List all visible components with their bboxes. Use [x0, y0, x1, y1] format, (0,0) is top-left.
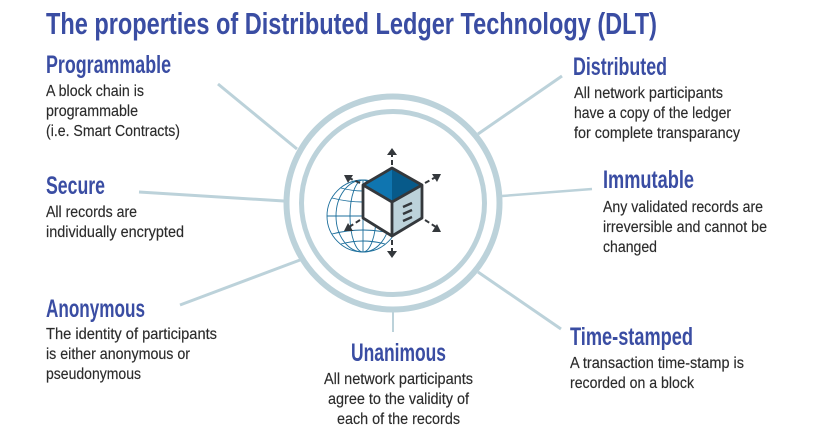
Unanimous: All network participants: [324, 371, 473, 388]
Immutable: irreversible and cannot be: [603, 219, 767, 236]
Distributed: [573, 53, 740, 142]
Anonymous: pseudonymous: [46, 366, 141, 383]
Distributed: All network participants: [574, 85, 723, 102]
Unanimous: agree to the validity of: [328, 391, 469, 408]
Distributed: for complete transparancy: [574, 125, 740, 142]
Distributed: have a copy of the ledger: [574, 105, 732, 122]
Secure: Secure: [46, 172, 105, 200]
Anonymous: [46, 295, 217, 383]
Programmable: programmable: [46, 103, 138, 120]
connector lines: [139, 76, 592, 332]
Immutable: changed: [603, 239, 657, 256]
Anonymous: Anonymous: [46, 295, 145, 323]
Time-stamped: A transaction time-stamp is: [570, 355, 744, 372]
Secure: All records are: [46, 204, 137, 221]
Anonymous: is either anonymous or: [46, 346, 191, 363]
Programmable: (i.e. Smart Contracts): [46, 123, 180, 140]
Programmable: [46, 51, 180, 140]
Unanimous: Unanimous: [351, 339, 446, 367]
Immutable: Any validated records are: [603, 199, 763, 216]
Unanimous: [324, 339, 473, 428]
Time-stamped: recorded on a block: [570, 375, 695, 392]
Secure: individually encrypted: [46, 224, 184, 241]
rings: [286, 96, 500, 310]
icon: cube: [363, 168, 422, 236]
Time-stamped: [570, 323, 744, 392]
Immutable: Immutable: [603, 166, 694, 194]
Anonymous: The identity of participants: [46, 326, 217, 343]
Immutable: [603, 166, 767, 256]
Time-stamped: Time-stamped: [570, 323, 693, 351]
title: The properties of Distributed Ledger Technology (DLT): [46, 6, 657, 41]
icon: outward arrows: [349, 153, 436, 253]
Secure: [46, 172, 184, 241]
Unanimous: each of the records: [337, 411, 460, 428]
Distributed: Distributed: [573, 53, 667, 81]
Programmable: Programmable: [46, 51, 171, 79]
icon: globe: [327, 180, 399, 252]
Programmable: A block chain is: [46, 83, 144, 100]
